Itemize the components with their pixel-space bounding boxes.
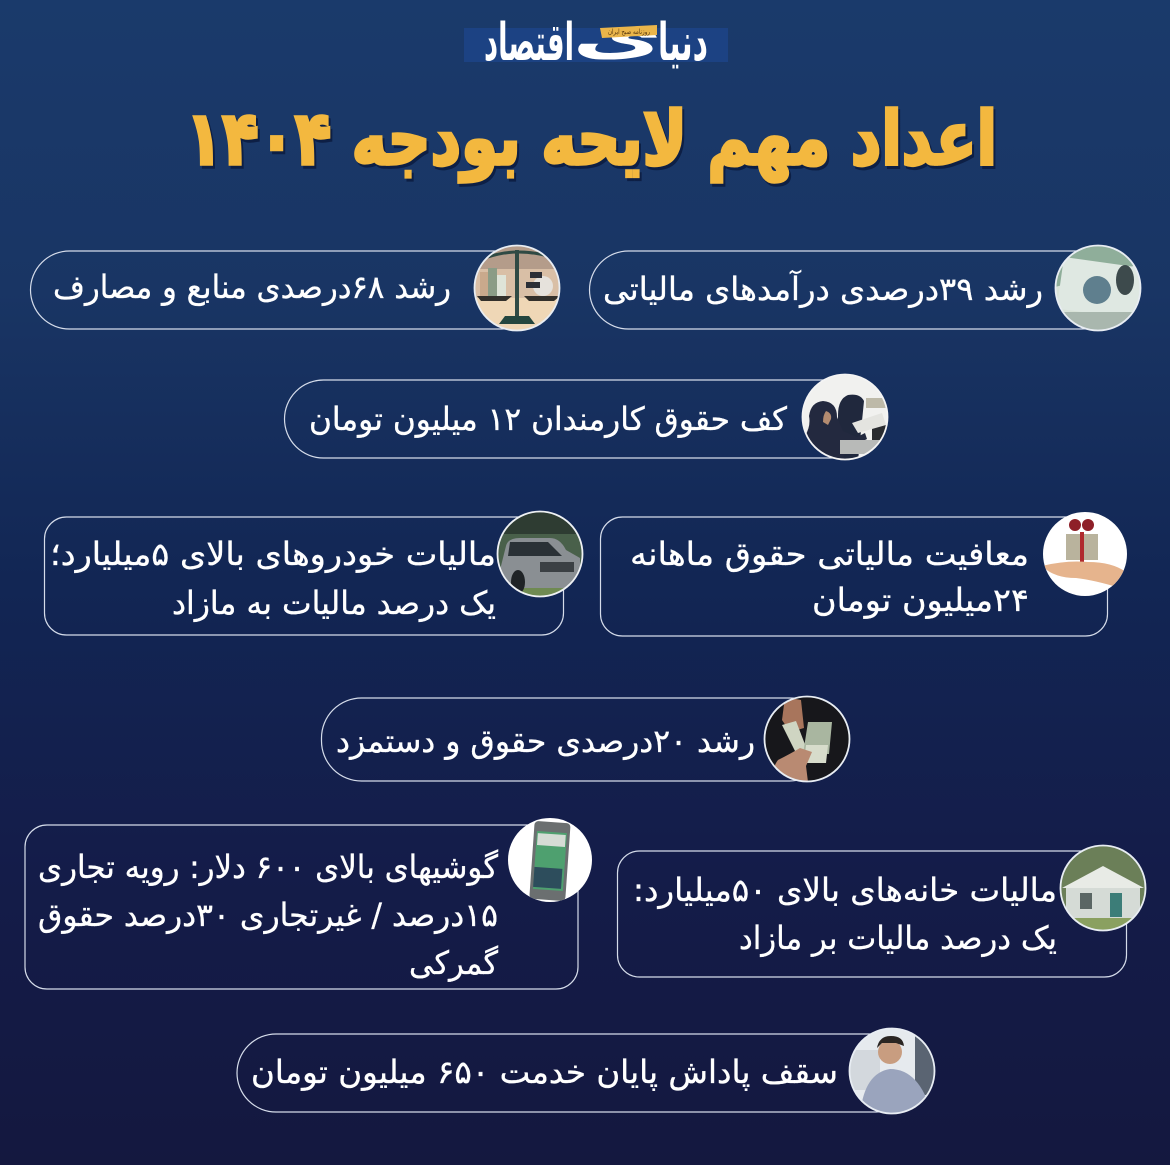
- panel: resources and expenses growth: رشد ۶۸درصدی منابع و مصارف: [53, 268, 451, 306]
- panel: phone customs duty: ۱۵درصد / غیرتجاری ۳۰درصد حقوق: [38, 896, 498, 934]
- icon: smartphone: [507, 817, 593, 903]
- logo: اقتصاد: [484, 13, 574, 73]
- panel: tax revenue growth: [588, 244, 1142, 332]
- panel: end of service bonus cap: [237, 1028, 935, 1115]
- panel: house tax: [618, 845, 1146, 977]
- icon: car: [497, 511, 583, 598]
- icon: dollars in hand: [764, 696, 850, 782]
- icon: gift on hand: [1042, 511, 1128, 597]
- panel: phone customs duty: گوشیهای بالای ۶۰۰ دلار: رویه تجاری: [38, 848, 499, 886]
- panel: minimum employee salary: کف حقوق کارمندان ۱۲ میلیون تومان: [309, 400, 788, 438]
- icon: house: [1060, 845, 1146, 931]
- panel: phone customs duty: [25, 817, 593, 989]
- panel: resources and expenses growth: [30, 245, 560, 334]
- title: اعداد مهم لایحه بودجه ۱۴۰۴: [186, 96, 997, 183]
- panel: end of service bonus cap: سقف پاداش پایان خدمت ۶۵۰ میلیون تومان: [251, 1053, 838, 1091]
- panel: luxury car tax: مالیات خودروهای بالای ۵میلیارد؛: [50, 535, 496, 573]
- logo: ی: [572, 7, 662, 67]
- logo: روزنامه صبح ایران: [608, 28, 650, 36]
- icon: balance scale: [474, 245, 560, 334]
- panel: phone customs duty: گمرکی: [409, 944, 499, 982]
- icon: man on phone: [849, 1028, 935, 1115]
- panel: tax revenue growth: رشد ۳۹درصدی درآمدهای مالیاتی: [603, 269, 1043, 308]
- panel: minimum employee salary: [284, 374, 888, 463]
- panel: monthly salary tax exemption: [600, 511, 1128, 636]
- panel: monthly salary tax exemption: معافیت مالیاتی حقوق ماهانه: [630, 535, 1029, 573]
- panel: house tax: مالیات خانه‌های بالای ۵۰میلیارد:: [633, 871, 1057, 909]
- panel: wages growth: رشد ۲۰درصدی حقوق و دستمزد: [336, 722, 755, 760]
- icon: banknotes: [1056, 246, 1140, 330]
- logo: دنیا: [658, 13, 708, 73]
- panel: monthly salary tax exemption: ۲۴میلیون تومان: [812, 581, 1029, 619]
- panel: luxury car tax: [44, 511, 583, 635]
- title: اعداد مهم لایحه بودجه ۱۴۰۴: [188, 99, 999, 186]
- panel: wages growth: [322, 696, 850, 782]
- icon: office workers: [802, 374, 888, 463]
- logo: [464, 7, 728, 73]
- panel: luxury car tax: یک درصد مالیات به مازاد: [172, 584, 496, 622]
- panel: house tax: یک درصد مالیات بر مازاد: [739, 919, 1057, 957]
